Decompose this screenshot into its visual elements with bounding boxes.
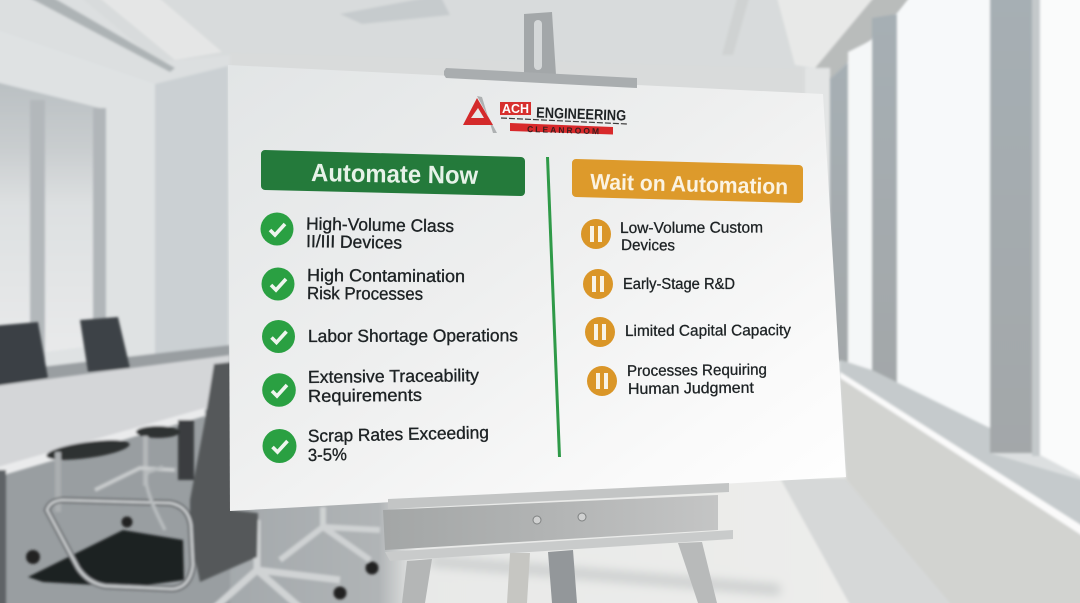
- logo mark: [463, 96, 497, 133]
- icon: pause: [581, 219, 611, 249]
- icon: pause: [587, 366, 617, 396]
- icon: check: [262, 373, 296, 407]
- chair seat: [28, 530, 184, 587]
- logo ENGINEERING: ENGINEERING: [536, 105, 626, 125]
- board top clamp: [444, 68, 637, 88]
- item: human judgment: Processes Requiring: [627, 362, 767, 380]
- icon: pause: [585, 317, 615, 347]
- easel bottom tray: [383, 483, 733, 561]
- logo CLEANROOM: [510, 123, 613, 136]
- panel: wait on automation: [576, 163, 799, 398]
- item: limited capital: Limited Capital Capacity: [625, 322, 791, 340]
- item: human judgment: Human Judgment: [628, 380, 755, 398]
- item: scrap rates: 3-5%: [308, 444, 347, 465]
- item: contamination: Risk Processes: [307, 283, 423, 304]
- heading: automate now: Automate Now: [311, 159, 479, 190]
- heading: wait on automation: Wait on Automation: [590, 169, 788, 199]
- logo CLEANROOM: CLEANROOM: [527, 124, 599, 136]
- item: scrap rates: Scrap Rates Exceeding: [308, 422, 489, 446]
- item: traceability: Requirements: [308, 385, 422, 406]
- chair shell: [190, 362, 258, 582]
- easel: [402, 12, 717, 603]
- item: low-volume: [581, 219, 763, 254]
- icon: check: [262, 429, 296, 463]
- item: labor shortage: Labor Shortage Operations: [308, 325, 518, 346]
- item: high-volume: II/III Devices: [306, 231, 403, 253]
- display board: [228, 65, 846, 511]
- item: human judgment: [587, 362, 767, 398]
- item: early-stage: Early-Stage R&D: [623, 276, 735, 293]
- item: scrap rates: [262, 422, 489, 465]
- item: high-volume: [260, 212, 454, 253]
- icon: pause: [583, 269, 613, 299]
- item: early-stage: [583, 269, 735, 299]
- tray bolts: [533, 513, 586, 524]
- item: low-volume: Low-Volume Custom: [620, 220, 763, 237]
- item: traceability: [262, 365, 479, 407]
- item: contamination: High Contamination: [307, 265, 465, 286]
- chair arm: [47, 500, 193, 589]
- icon: check: [262, 320, 295, 353]
- item: labor shortage: [262, 320, 518, 353]
- panel: automate now: [260, 154, 521, 465]
- windows on the right wall: [830, 0, 1080, 603]
- item: traceability: Extensive Traceability: [308, 365, 479, 387]
- easel legs: [402, 542, 717, 603]
- green divider: [546, 157, 561, 457]
- logo ACH: ACH: [502, 101, 529, 116]
- item: high-volume: High-Volume Class: [306, 214, 454, 236]
- icon: check: [260, 212, 294, 246]
- logo: [463, 96, 627, 136]
- heading: automate now: [265, 154, 521, 192]
- item: low-volume: Devices: [621, 237, 675, 254]
- logo dashed rule: [501, 118, 627, 124]
- item: limited capital: [585, 317, 791, 347]
- easel top mast: [524, 12, 556, 75]
- conference table and chairs: [0, 317, 380, 603]
- chair bases: [280, 507, 380, 560]
- item: contamination: [262, 265, 465, 304]
- icon: check: [262, 268, 294, 300]
